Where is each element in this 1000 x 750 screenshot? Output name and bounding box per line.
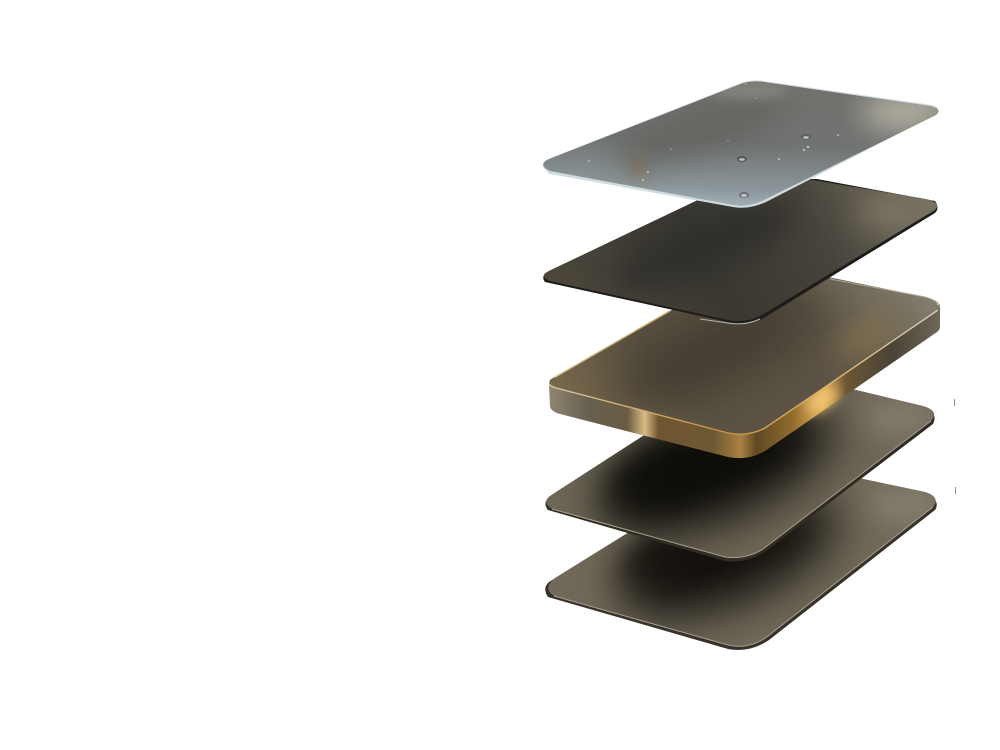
water droplets: [588, 83, 839, 198]
slab side highlight: [802, 382, 842, 418]
slab side wall: [549, 304, 940, 458]
layer 1: frosted top plate with droplets: [540, 78, 950, 210]
layer 4: lower plate: [545, 390, 935, 562]
small edge marks at right: [954, 399, 956, 494]
layer 3: thick glowing gold slab: [548, 277, 940, 458]
illustration: exploded stack of five layers: [542, 80, 956, 650]
layer 5: bottom plate: [545, 478, 937, 650]
layer 2: dark plate: [540, 170, 945, 325]
slab top surface: [549, 277, 938, 434]
